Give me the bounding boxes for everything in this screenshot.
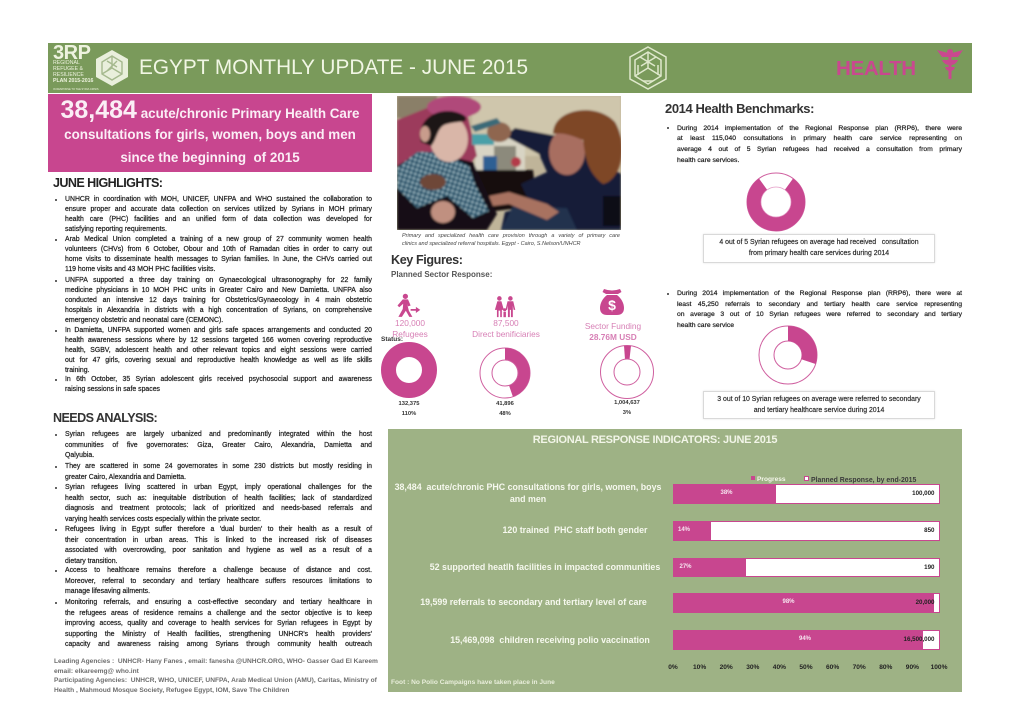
key figure: sector funding [585,289,654,416]
bullet 2: 119 home visits and 43 MOH PHC facilities visits. [65,266,215,273]
bullet 3: emergency obstetric and neonatal care (CEMONC). [65,317,223,324]
caption: referrals benchmark: 3 out of 10 Syrian refugees on average were referred to secondary [717,396,921,403]
bullet: referrals benchmark [677,289,962,331]
bullet 1: communities of five governorates: Giza, Greater Cairo, Alexandria, Damietta and [65,442,372,448]
indicator label 5: 15,469,098 children receiving polio vaccination [450,635,650,645]
headline line 2: consultations for girls, women, boys and men [64,127,356,142]
subheading: planned sector response: Planned Sector Response: [391,270,492,279]
tick 20%: 20% [720,664,733,671]
caption: referrals benchmark: and tertiary healthcare service during 2014 [754,407,884,414]
bullet 1: ensure proper and accurate data collection on services utilized by Syrians in MOH primary [65,206,372,213]
donut: refugees 110% [381,342,437,398]
tick 70%: 70% [853,664,866,671]
refugees value: 132,375 [399,401,419,407]
target 100,000: 100,000 [912,490,934,497]
bullet 1: satisfying reporting requirements. [65,226,167,233]
footer: agencies [54,658,378,694]
tick 60%: 60% [826,664,839,671]
bullet 4: health awareness sessions where by 12 sessions targeted 166 women covering reproductive [65,337,372,344]
icon: hexagon outline emblem [629,46,667,90]
donut: 4 out of 5 [746,172,806,232]
beneficiaries value: 41,896 [496,401,514,407]
bullet 3: diagnosis and treatment protocols; lack of prioritized and needs-based referrals and [65,505,372,512]
target 20,000: 20,000 [916,599,934,606]
bullet 4: dietary transition. [65,558,117,564]
bullet 4 [65,525,372,567]
bullet 4: health, SGBV, adolescent health and other relevant topics and eight sessions were carried [65,347,372,354]
tick 80%: 80% [879,664,892,671]
icon: money bag [600,289,624,315]
tick 50%: 50% [799,664,813,671]
tick 30%: 30% [746,664,759,671]
chart legend [751,476,916,484]
bullet 3 [65,276,372,326]
funding value: 3% [623,410,631,416]
bullet 6: the refugees areas of residence remains a challenge and the sector objective is to keep [65,610,372,616]
donut: funding 3% [600,345,654,399]
bullet 5 [65,375,372,395]
bullet 5: Moreover, referral to secondary and tertiary healthcare suffers resources limitations to [65,578,372,584]
progress 27% [673,558,746,577]
progress 98%: 98% [782,599,794,605]
logo: hexagon emblem [96,50,128,86]
refugees count: 120,000 [395,318,425,328]
stacked bar 4 [673,593,940,613]
bullet 5: manage lifesaving ailments. [65,588,150,595]
bullet 3: UNFPA supported a three day training on Gynaecological ultrasonography for 22 family [65,277,372,284]
header banner [48,43,972,93]
photo caption: Primary and specialized health care provision through a variety of primary care [402,233,620,239]
logo: 3RP wordmark: REFUGEE & [53,66,83,72]
text block: needs analysis bullets [55,430,372,648]
bullet 1 [65,430,372,462]
target 850: 850 [924,527,934,534]
photo: health worker examining child [397,96,621,230]
bullet: primary care benchmark: health care services. [677,157,739,164]
bullet 5: Access to healthcare remains therefore a challenge because of distance and cost. [65,567,372,574]
key figure: direct beneficiaries [472,296,540,416]
panel title: REGIONAL RESPONSE INDICATORS: JUNE 2015 [533,434,777,446]
logo: 3RP wordmark: RESILIENCE [53,72,84,78]
bullet 2: Arab Medical Union completed a training of a new group of 27 community women health [65,236,372,243]
bullet: referrals benchmark: During 2014 implementation of the Regional Response plan (RRP6), there were at [677,290,962,297]
tick 10%: 10% [693,664,706,671]
bullet 2: home visits to disseminate health messages to Syrian families. In June, the CHVs carried out [65,256,372,263]
bullet: referrals benchmark: health care service [677,322,734,329]
bullet 3: conducted an intensive 12 days training for Obstetrics/Gynaecology in 4 main obstetric [65,297,372,304]
tick 40%: 40% [773,664,786,671]
bullet 4: out for 47 girls, covering sexual and reproductive health knowledge as well as life skills [65,357,372,364]
logo: 3RP wordmark [53,42,99,91]
key figure: refugees [381,294,437,416]
icon: family [494,296,516,318]
progress 38% [673,484,776,504]
donut: beneficiaries 48% [480,348,530,398]
logo: 3RP wordmark: PLAN 2015-2016 [53,78,93,84]
bullet: primary care benchmark [677,124,962,167]
indicator label 4: 19,599 referrals to secondary and tertiary level of care [420,597,647,607]
funding value: 1,004,637 [614,400,640,406]
bullet 6: capacity and awareness raising among Syrians through community health outreach [65,641,372,648]
funding label: Sector Funding [585,321,641,331]
icon: health caduceus [937,49,963,79]
funding value [614,400,640,416]
bullet 1: health care (PHC) facilities and an unified form of data collection was developed for [65,216,372,223]
footnote: Foot : No Polio Campaigns have taken place in June [391,679,555,686]
headline line 1: 38,484 acute/chronic Primary Health Care [60,96,360,124]
bullet 3: medicine physicians in 10 MOH PHC units in Greater Cairo and New Damietta. UNFPA also [65,287,372,294]
photo caption: clinics and specialized referral hospitals. Egypt - Cairo, S.Nelson/UNHCR [402,241,581,247]
bullet 2: volunteers (CHVs) from 6 October, Obour and 10th of Ramadan cities in order to carry out [65,246,372,253]
indicator label 2: 120 trained PHC staff both gender [503,525,647,535]
caption: referrals benchmark [703,391,935,419]
stacked bar 2 [673,521,940,541]
refugees value: 110% [402,410,416,416]
donut: 3 out of 10 [758,326,818,384]
progress 14%: 14% [678,527,690,533]
heading: June highlights: JUNE HIGHLIGHTS: [53,176,162,190]
beneficiaries label: Direct benificiaries [472,329,540,339]
heading: needs analysis: NEEDS ANALYSIS: [53,411,157,425]
bullet 1: Syrian refugees are largely urbanized and predominantly integrated within the host [65,431,372,438]
indicator label 1: and men [510,494,546,504]
tick 100%: 100% [931,664,947,671]
bullet 1 [65,195,372,235]
panel: headline figure [48,94,372,172]
bullet: primary care benchmark: at least 115,040 consultations in primary health care service representing on [677,135,962,142]
target 16,500,000: 16,500,000 [904,636,934,643]
caption: primary care benchmark [703,234,935,263]
caption: primary care benchmark: from primary health care services during 2014 [749,250,889,257]
panel: regional response indicators [388,429,962,692]
bullet 4: training. [65,367,90,374]
funding amount: 28.76M USD [589,332,637,342]
chart axis labels [668,664,948,671]
bullet 4: associated with overcrowding, poor sanitation and hygiene as well as a result of a [65,547,372,554]
bullet 5: In 6th October, 35 Syrian adolescent girls received psychosocial support and awareness [65,376,372,383]
legend: planned response: Planned Response, by end-2015 [811,477,916,484]
heading: key figures: Key Figures: [391,253,462,267]
bullet 4: their concentration in urban areas. This is linked to the increased risk of diseases [65,536,372,544]
bullet 4: Refugees living in Egypt suffer therefore a 'dual burden' to their health as a result of [65,526,372,533]
headline line 3: since the beginning of 2015 [120,150,300,165]
progress 98% [673,593,934,613]
bullet 3: health sector, such as: inequitable distribution of health facilities; lack of standardized [65,494,372,502]
refugees value [398,401,420,416]
beneficiaries count: 87,500 [493,318,519,328]
bullet 3: Syrian refugees living scattered in urban Egypt, imply operational challenges for the [65,484,372,491]
bullet 4: In Damietta, UNFPA supported women and girls safe spaces arrangements and conducted 20 [65,327,372,334]
title: EGYPT MONTHLY UPDATE - JUNE 2015 [139,56,528,79]
heading: 2014 health benchmarks: 2014 Health Benchmarks: [665,101,814,116]
progress 94% [673,630,923,650]
progress 38%: 38% [720,490,732,496]
beneficiaries value: 48% [499,410,511,416]
stacked bar 5 [673,630,940,650]
tick 90%: 90% [906,664,919,671]
bullet 5: raising sessions in safe spaces [65,386,160,393]
target 190: 190 [924,564,934,571]
footer: agencies: Participating Agencies: UNHCR, WHO, UNICEF, UNFPA, Arab Medical Union (AMU), Caritas, Ministry of [54,677,377,684]
photo caption [402,233,620,247]
legend: progress: Progress [757,476,786,483]
progress 27%: 27% [679,564,692,570]
bullet 3 [65,483,372,525]
icon: money bag: $ [608,297,616,313]
bullet 2 [65,235,372,275]
logo: 3RP wordmark: IN RESPONSE TO THE SYRIA CRISIS [53,88,99,91]
bullet: primary care benchmark: During 2014 implementation of the Regional Response plan (RRP6), there were [677,124,962,132]
indicator label 1 [394,482,661,504]
bullet 6: improving access, quality and coverage to health services for Syrian refugees in Egypt by [65,620,372,627]
bullet 6 [65,598,372,650]
logo: 3RP wordmark: 3RP [53,42,90,64]
bullet 5 [65,566,372,598]
bullet 2: greater Cairo, Alexandria and Damietta. [65,474,186,480]
progress 94%: 94% [799,636,811,642]
logo: 3RP wordmark: REGIONAL [53,60,80,66]
status label: Status: [381,336,403,343]
bullet 2: They are scattered in some 24 governorates in some 230 districts but mostly residing in [65,463,372,470]
bullet 6: Monitoring referrals, and ensuring a cost-effective secondary and tertiary healthcare in [65,599,372,606]
beneficiaries value [496,401,514,416]
text block: June highlights bullets [55,195,372,393]
footer: agencies: Leading Agencies : UNHCR- Hany Fanes , email: fanesha @UNHCR.ORG, WHO- Gasser Gad El Kareem [54,658,378,665]
caption: primary care benchmark: 4 out of 5 Syrian refugees on average had received consultation [719,239,919,246]
progress 14% [673,521,711,541]
footer: agencies: email: elkareemg@ who.int [54,668,139,675]
sector label: HEALTH: HEALTH [836,57,916,80]
bullet 1: Qalyubia. [65,452,94,459]
bullet: referrals benchmark: least 45,250 referrals to secondary and tertiary health care service representing [677,301,962,308]
indicator label 3: 52 supported heatlh facilities in impacted communities [430,562,660,572]
bullet 4 [65,326,372,376]
bullet: primary care benchmark: average 4 out of 5 Syrian refugees had received a consultation from primary [677,146,962,153]
bullet: referrals benchmark: on average 3 out of 10 Syrian refugees were referred to secondary and tertiary [677,311,962,318]
bullet 3: varying health services costs especially within the private sector. [65,516,261,522]
stacked bar 3 [673,558,940,577]
bullet 3: hospitals in Alexandria in districts with a high concentration of Syrians, on comprehensive [65,307,372,314]
stacked bar 1 [673,484,940,504]
icon: walking person with arrow [398,294,420,317]
tick 0%: 0% [668,664,678,671]
bullet 2 [65,462,372,483]
bullet 1: UNHCR in coordination with MOH, UNICEF, UNFPA and WHO sustained the collaboration to [65,196,372,203]
footer: agencies: Health , Mahmoud Mosque Society, Refugee Egypt, IOM, Save The Children [54,687,289,694]
indicator label 1: 38,484 acute/chronic PHC consultations for girls, women, boys [395,482,661,492]
bullet 6: supporting the Ministry of Health facilities, strengthening UNHCR's health providers' [65,630,372,638]
refugees label: Refugees [392,329,428,339]
